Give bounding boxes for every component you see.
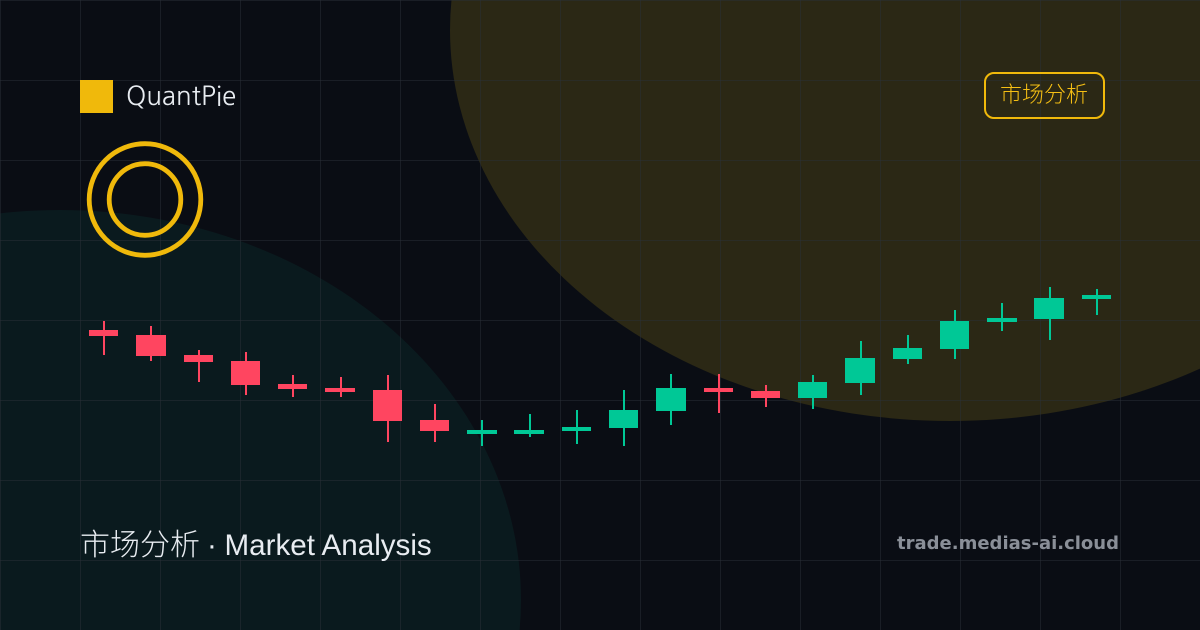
badge: market analysis: 市场分析 (1000, 82, 1088, 107)
candlestick chart (89, 287, 1111, 446)
logo: brand mark and name (80, 80, 236, 113)
rising candles (467, 287, 1111, 446)
title: Market Analysis (224, 529, 432, 562)
badge: market analysis (985, 73, 1104, 118)
brand name: QuantPie (126, 83, 236, 109)
title: 市场分析 (80, 520, 200, 564)
site url: trade.medias-ai.cloud (897, 533, 1119, 554)
title: · (207, 529, 217, 562)
icon: concentric rings (89, 144, 201, 255)
icon: yellow square (80, 80, 113, 113)
falling candles (89, 321, 780, 442)
